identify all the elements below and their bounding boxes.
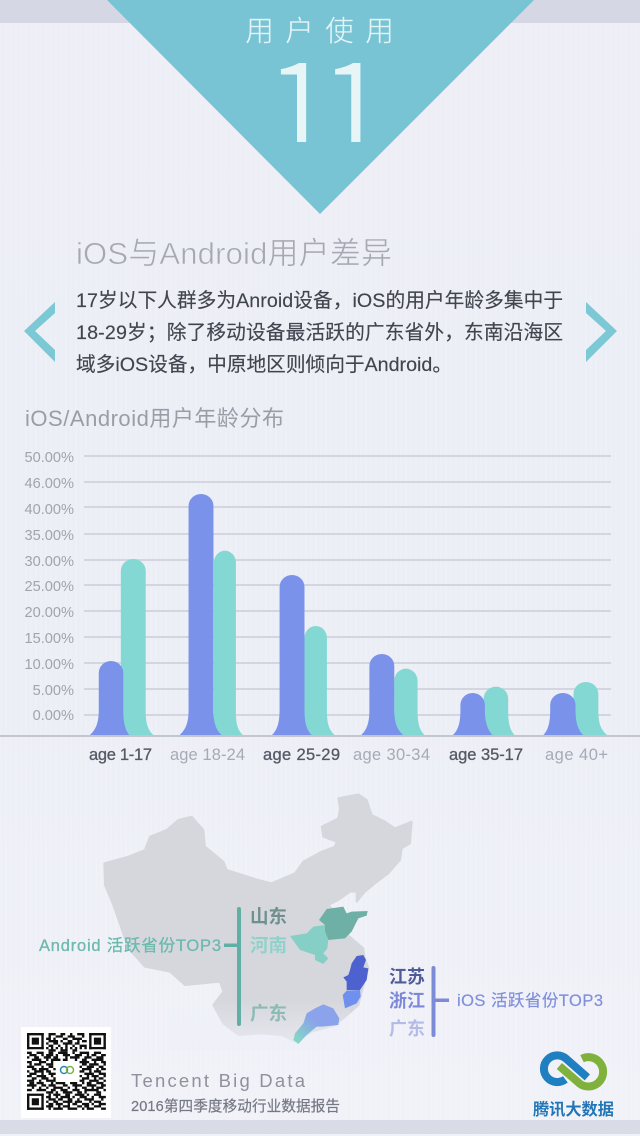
footer: report credit: Tencent Big Data	[131, 1070, 306, 1091]
chart title: iOS/Android用户年龄分布	[25, 406, 284, 431]
y axis labels: 15.00%	[24, 631, 74, 647]
y axis labels: 0.00%	[33, 708, 74, 724]
logo: Tencent Big Data: 腾讯大数据	[533, 1101, 614, 1119]
y axis labels: 20.00%	[24, 605, 74, 621]
y axis labels: 50.00%	[24, 450, 74, 466]
bar chart: age distribution	[0, 450, 640, 764]
bars: Android series	[121, 551, 608, 736]
icon: right arrow	[586, 302, 617, 362]
y axis labels: 46.00%	[24, 476, 74, 492]
QR code	[21, 1027, 111, 1118]
callout: iOS top 3 provinces: 浙江	[389, 991, 425, 1011]
x axis labels: age 25-29	[263, 746, 340, 764]
body text	[76, 290, 563, 376]
x axis labels	[89, 746, 608, 764]
x axis labels: age 1-17	[89, 746, 152, 764]
section heading: iOS与Android用户差异	[76, 236, 392, 271]
callout: Android top 3 provinces: Android 活跃省份TOP3	[39, 936, 221, 955]
callout: Android top 3 provinces: 广东	[250, 1003, 287, 1024]
x axis labels: age 35-17	[449, 746, 523, 764]
body text: 18-29岁；除了移动设备最活跃的广东省外，东南沿海区	[76, 322, 563, 344]
body text: 域多iOS设备，中原地区则倾向于Android。	[76, 354, 452, 376]
callout: Android top 3 provinces	[39, 906, 287, 1026]
x axis labels: age 18-24	[170, 746, 245, 764]
callout: Android top 3 provinces: 河南	[250, 935, 287, 956]
y axis labels: 35.00%	[24, 528, 74, 544]
x axis labels: age 30-34	[353, 746, 430, 764]
y axis labels: 25.00%	[24, 579, 74, 595]
map of China	[104, 794, 412, 1050]
header triangle	[107, 0, 534, 214]
header label: 用户使用	[245, 15, 405, 48]
y axis labels: 5.00%	[33, 683, 74, 699]
y axis labels: 30.00%	[24, 554, 74, 570]
callout: iOS top 3 provinces	[389, 966, 603, 1039]
footer: report credit: 2016第四季度移动行业数据报告	[131, 1097, 340, 1115]
province: Jiangsu	[343, 955, 368, 990]
province: Shandong	[319, 907, 368, 940]
body text: 17岁以下人群多为Anroid设备，iOS的用户年龄多集中于	[76, 290, 563, 312]
x axis labels: age 40+	[545, 746, 608, 764]
province: Henan	[290, 925, 328, 964]
y axis labels: 40.00%	[24, 502, 74, 518]
logo: Tencent Big Data	[533, 1055, 614, 1119]
province: Zhejiang	[343, 990, 361, 1008]
province: Guangdong	[293, 1004, 339, 1044]
callout: iOS top 3 provinces: 广东	[389, 1018, 425, 1039]
section number: 11	[265, 10, 380, 188]
bars: iOS series	[89, 494, 584, 736]
callout: iOS top 3 provinces: iOS 活跃省份TOP3	[457, 991, 603, 1010]
bottom band	[0, 1120, 640, 1134]
callout: iOS top 3 provinces: 江苏	[389, 967, 425, 987]
icon: left arrow	[24, 302, 55, 362]
callout: Android top 3 provinces: 山东	[250, 906, 287, 927]
y axis labels: 10.00%	[24, 657, 74, 673]
y axis labels	[24, 450, 74, 724]
footer: report credit	[131, 1070, 340, 1115]
